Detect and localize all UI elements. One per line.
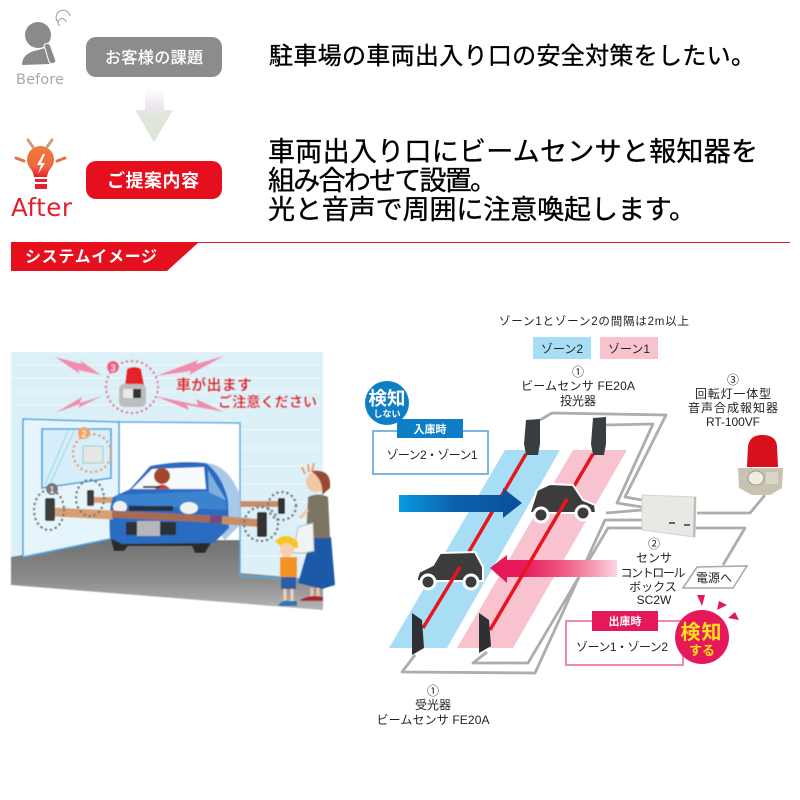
sensors: emitters [524,417,606,455]
button: proposal: ご提案内容 [107,170,199,191]
label: beam sensor emitter [521,365,635,408]
vehicle: exiting [417,552,483,589]
icon: before person [22,10,70,65]
label: to power: 電源へ [696,571,732,585]
callout: entering, no detection: ゾーン2・ゾーン1 [386,448,478,462]
heading: proposal statement: 組み合わせて設置。 [268,166,497,196]
label: control box [620,537,686,607]
floor [11,537,323,610]
callout: exiting, detection: ゾーン1・ゾーン2 [576,640,668,654]
heading: proposal statement [268,137,758,225]
heading: issue statement: 駐車場の車両出入り口の安全対策をしたい。 [269,43,755,70]
driver [154,468,170,484]
icon: after light bulb [16,140,65,189]
illustration: garage scene: 1 [49,485,55,495]
label: rotating light alarm: RT-100VF [706,415,760,429]
device: rotating light alarm [738,435,783,495]
button: proposal [86,161,222,199]
label: rotating light alarm: 回転灯一体型 [695,387,771,401]
label: control box: ② [648,537,660,551]
legend: zone 1 [600,337,658,359]
garage opening [120,422,240,540]
legend: zone 2: ゾーン2 [541,342,583,356]
heading: proposal statement: 車両出入り口にビームセンサと報知器を [268,137,758,167]
illustration: garage scene: 2 [81,429,87,439]
vehicle: entering [530,484,596,522]
beam: zone 2 [460,454,526,567]
arrow: exiting [490,555,617,583]
callout: entering, no detection: しない [373,409,401,419]
callout: entering, no detection: 検知 [368,388,406,409]
label: beam sensor receiver [376,684,490,727]
arrow: entering [399,488,522,518]
arrow: before to after [135,88,173,142]
label: beam sensor receiver: 受光器 [415,698,451,712]
car rear body [205,463,240,540]
note: zone spacing: ゾーン1とゾーン2の間隔は2m以上 [499,315,689,328]
label: control box: コントロール [620,566,686,580]
legend: zone 2 [533,337,591,359]
section heading: system image: システムイメージ [25,249,157,266]
button: customer issue: お客様の課題 [105,49,203,67]
beam: zone 2 lower [423,567,460,628]
beam front [53,512,113,515]
beam: zone 1 upper [570,454,593,493]
right sensors [257,512,267,537]
label: beam sensor emitter: ① [572,365,584,379]
label: rotating light alarm: 音声合成報知器 [688,401,778,415]
label: After: After [11,193,73,222]
label: beam sensor emitter: 投光器 [560,393,596,408]
label: beam sensor receiver: ① [427,684,439,698]
warning text: 車が出ます [176,376,252,394]
control box [83,446,103,463]
beam: zone 1 lower [490,499,567,630]
left sensors [45,498,55,521]
label: control box: ボックス [629,580,677,594]
car shadow and wheels [110,536,215,553]
label: control box: センサ [636,551,672,565]
callout: exiting, detection: 検知 [680,621,722,644]
wiring [402,413,765,673]
beams rear [93,497,120,503]
button: customer issue [86,37,222,77]
callout: entering, no detection [365,381,488,474]
callout: exiting, detection: 出庫時 [608,614,642,628]
siding lines [11,365,323,556]
child [275,536,298,548]
callout: exiting, detection [566,595,739,665]
label: control box: SC2W [637,593,672,607]
sound bolts [55,356,224,413]
callout: exiting, detection: する [689,643,715,658]
diagram: detection zones [389,413,765,673]
illustration: garage scene [11,352,335,610]
callout: entering, no detection: 入庫時 [414,422,446,436]
label: rotating light alarm: ③ [727,373,739,387]
sensors: receivers [412,613,491,655]
illustration: garage scene: ご注意ください [218,394,317,410]
label: beam sensor emitter: ビームセンサ FE20A [521,379,635,393]
device: control box [642,495,696,537]
zone 2 band [389,450,560,648]
label: beam sensor receiver: ビームセンサ FE20A [376,713,490,727]
label: Before: Before [16,71,64,88]
heading: proposal statement: 光と音声で周囲に注意喚起します。 [268,195,696,225]
headlights and grille [113,501,127,513]
alarm [106,361,158,413]
woman [298,537,335,589]
legend: zone 1: ゾーン1 [608,342,650,356]
window [42,429,111,488]
label: rotating light alarm [688,373,778,429]
label: to power [683,566,747,588]
zone 1 band [457,450,627,648]
shutter panel [23,419,119,557]
illustration: garage scene: 3 [110,363,116,373]
wall [11,352,323,584]
section heading: system image [11,242,790,271]
car body [109,462,229,544]
